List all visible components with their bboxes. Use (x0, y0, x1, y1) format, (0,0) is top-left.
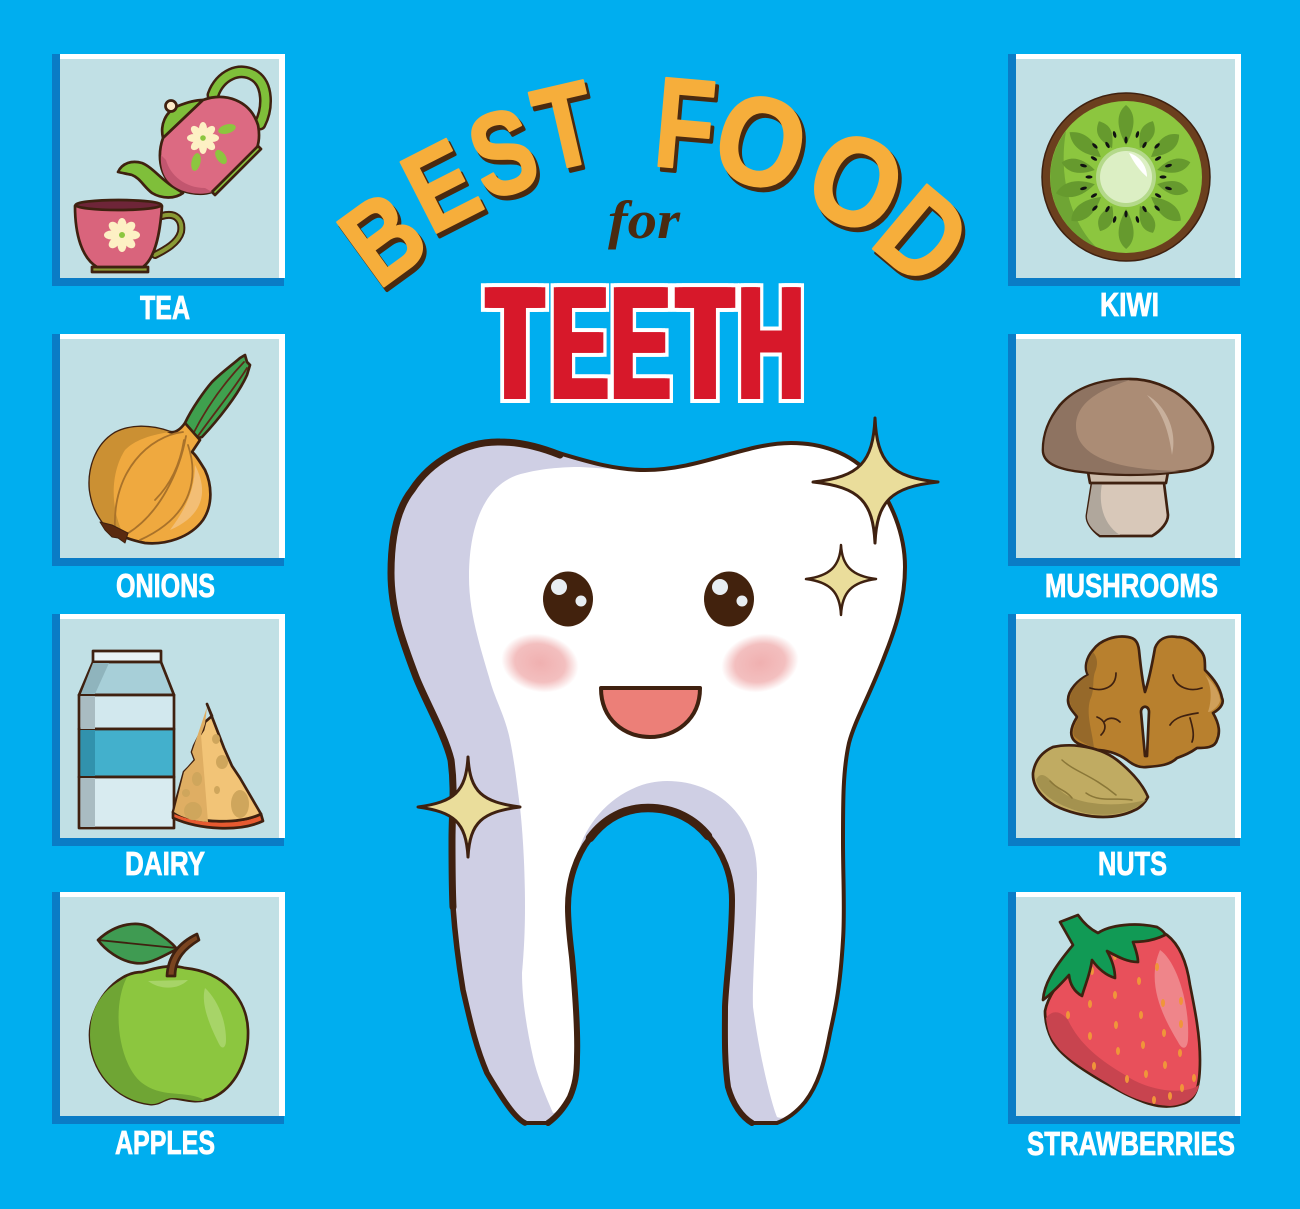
title: Teeth: T (492, 256, 545, 432)
icon: strawberry (1043, 915, 1200, 1107)
panel: onions (52, 334, 285, 604)
title: Best Food (318, 50, 998, 316)
title: Teeth: T (675, 256, 728, 432)
icon: teapot (118, 72, 265, 198)
title: Best Food: F (653, 54, 723, 201)
title: Teeth: H (740, 256, 806, 432)
tooth white face (469, 443, 905, 1118)
title: Teeth: H (735, 256, 801, 432)
icon: apple (90, 924, 248, 1104)
title: Teeth: T (678, 256, 732, 432)
title: Best Food: D (851, 160, 995, 312)
icon: kiwi (1042, 93, 1210, 261)
title: Teeth: E (553, 254, 610, 431)
panel: tea (52, 54, 285, 326)
label: apples: APPLES (115, 1124, 215, 1161)
label: kiwi: KIWI (1100, 286, 1159, 323)
icon: milk carton (79, 651, 174, 828)
panel: nuts (1008, 614, 1241, 882)
label: onions: ONIONS (116, 567, 215, 604)
title: Teeth: T (488, 256, 542, 432)
icon: mushroom (1043, 379, 1213, 536)
sparkle: small right (806, 545, 876, 615)
title: Best Food: E (387, 119, 502, 262)
title: Teeth: T (485, 256, 538, 432)
panel: apples (52, 892, 285, 1161)
title: Best Food: T (525, 59, 611, 201)
title: Teeth: T (684, 256, 737, 432)
title: Best Food: S (458, 86, 555, 229)
title: Best Food: O (700, 64, 821, 221)
sparkle: top right (813, 418, 938, 543)
left cheek (496, 627, 584, 699)
label: nuts: NUTS (1098, 845, 1167, 882)
title: Teeth: E (611, 256, 670, 432)
title: Best Food: T (522, 55, 608, 197)
title: Best Food: O (792, 105, 926, 268)
title: Best Food: B (318, 167, 449, 310)
title: Teeth: H (741, 256, 807, 432)
title: Teeth: E (551, 254, 608, 431)
panel: dairy (52, 614, 285, 882)
panel: strawberries (1008, 892, 1241, 1162)
label: strawberries: STRAWBERRIES (1027, 1125, 1235, 1162)
right eye (704, 572, 754, 626)
title: Best Food: F (650, 50, 720, 197)
icon: onion (90, 355, 250, 543)
panel: kiwi (1008, 54, 1241, 323)
tooth outline (391, 442, 905, 1123)
icon: walnut (1068, 637, 1223, 767)
tooth body shading (391, 442, 905, 1123)
title: Teeth: H (738, 256, 804, 432)
tooth character (391, 418, 938, 1123)
icon: almond (1033, 745, 1148, 817)
title: Teeth: T (488, 256, 542, 432)
label: tea: TEA (140, 289, 190, 326)
title: Teeth: E (548, 254, 605, 431)
label: mushrooms: MUSHROOMS (1045, 567, 1218, 604)
title: Teeth: E (614, 256, 673, 432)
title: Best Food: S (455, 82, 552, 225)
title: Teeth: T (483, 256, 536, 432)
title: Teeth: H (738, 256, 804, 432)
title: Teeth: E (613, 256, 672, 432)
icon: teacup (75, 200, 181, 272)
title: Teeth: E (551, 254, 608, 431)
title: Best Food: O (703, 68, 824, 225)
title: Teeth: T (494, 256, 547, 432)
title: Best Food: B (321, 171, 452, 314)
title: Teeth: E (611, 256, 670, 432)
panel: mushrooms (1008, 334, 1241, 604)
title: Teeth: T (673, 256, 726, 432)
title: Teeth: E (549, 254, 606, 431)
title: Best Food: E (384, 115, 499, 258)
title: Teeth: E (609, 256, 668, 432)
mouth (601, 688, 700, 737)
sparkle: lower left (418, 757, 520, 857)
title: Teeth (483, 254, 807, 432)
label: dairy: DAIRY (125, 845, 205, 882)
right cheek (716, 627, 804, 699)
title: Best Food: O (789, 101, 923, 264)
title: Teeth: H (736, 256, 802, 432)
title: Best Food: D (854, 164, 998, 316)
left eye (543, 572, 593, 626)
title: for: for (608, 190, 681, 250)
title: Teeth: T (682, 256, 735, 432)
icon: cheese (173, 704, 263, 828)
title: Teeth: T (678, 256, 732, 432)
title: Teeth: E (608, 256, 667, 432)
title: Teeth: E (554, 254, 611, 431)
